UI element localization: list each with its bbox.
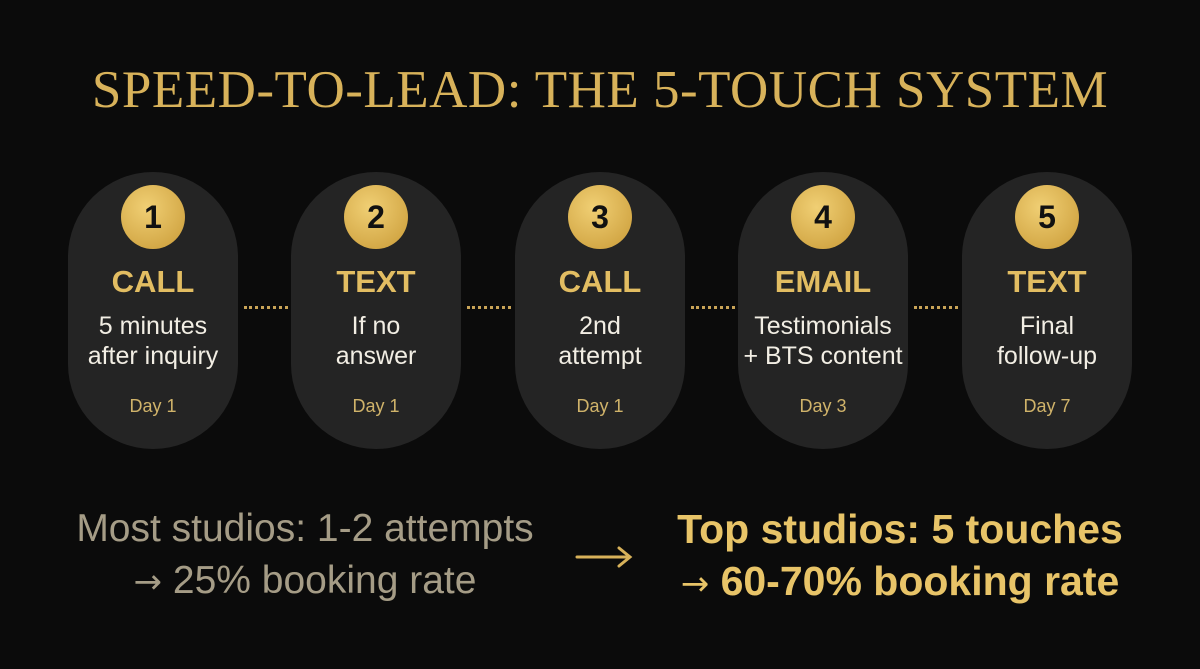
step 5: 5 [1038,199,1056,235]
step 1: CALL [112,264,194,299]
connector 1-2 [244,306,288,309]
step 4: Day 3 [799,396,847,416]
step 2: answer [336,342,416,370]
step 5 [962,172,1132,449]
step 5: TEXT [1007,264,1087,299]
step 3: 3 [591,199,609,235]
step 5: follow-up [997,342,1097,370]
step 4: Testimonials [754,312,892,340]
step 5: Final [1020,312,1074,340]
comparison: top studios: → 60-70% booking rate [681,558,1119,604]
step 2: If no [352,312,400,340]
title: SPEED-TO-LEAD: THE 5-TOUCH SYSTEM [92,61,1108,119]
step 1: after inquiry [88,342,218,370]
step 4: 4 [814,199,832,235]
step 3: attempt [558,342,642,370]
connector 2-3 [467,306,511,309]
step 5: Day 7 [1023,396,1071,416]
step 3: 2nd [579,312,621,340]
step 3 [515,172,685,449]
step 3: CALL [559,264,641,299]
step 1: Day 1 [129,396,177,416]
step 1 [68,172,238,449]
comparison: top studios [677,506,1123,604]
comparison: most studios: Most studios: 1-2 attempts [76,507,534,550]
step 4: EMAIL [775,264,871,299]
comparison: most studios [76,507,534,602]
connector 3-4 [691,306,735,309]
step 4 [738,172,908,449]
comparison: most studios: → 25% booking rate [134,559,476,602]
step 2: 2 [367,199,385,235]
connector 4-5 [914,306,958,309]
step 2: Day 1 [352,396,400,416]
step 1: 5 minutes [99,312,207,340]
arrow [576,546,632,568]
comparison: top studios: Top studios: 5 touches [677,506,1123,552]
step 2 [291,172,461,449]
step 2: TEXT [336,264,416,299]
step 4: + BTS content [743,342,903,370]
step 3: Day 1 [576,396,624,416]
step 1: 1 [144,199,162,235]
